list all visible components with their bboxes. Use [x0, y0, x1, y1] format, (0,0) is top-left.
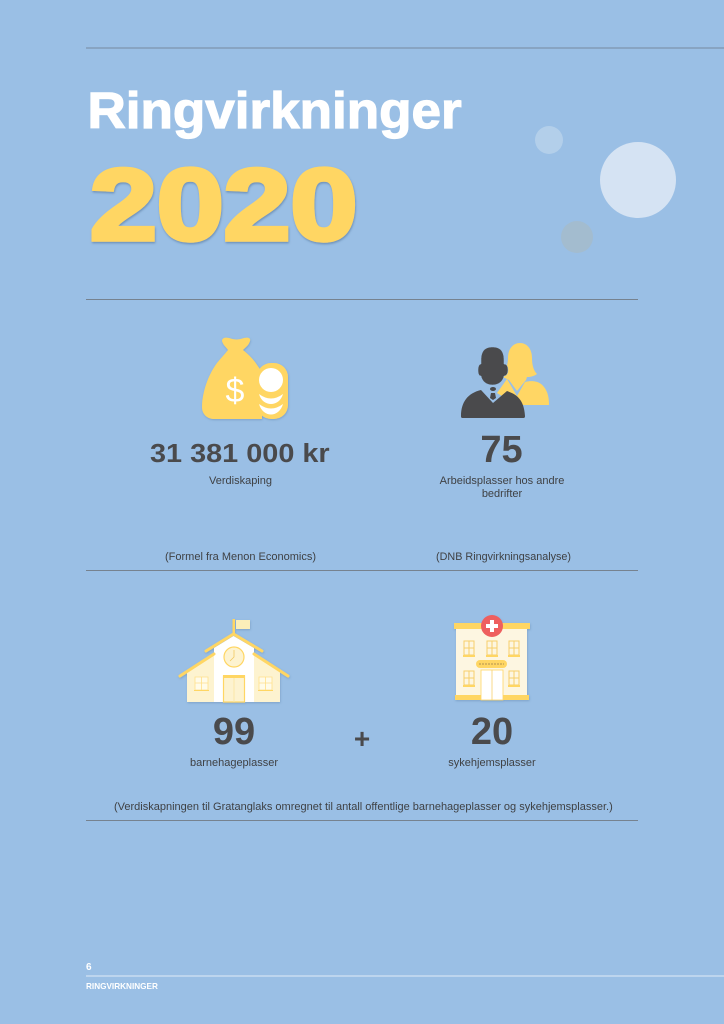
icon: money bag with coins: $	[226, 372, 245, 410]
label: Arbeidsplasser hos andre bedrifter	[440, 475, 564, 500]
source: Menon Economics: (Formel fra Menon Economics)	[165, 551, 316, 563]
label: Verdiskaping: Verdiskaping	[209, 475, 272, 487]
icon: nursing home building	[454, 615, 530, 700]
label: Arbeidsplasser hos andre bedrifter: bedrifter	[482, 488, 523, 500]
source: DNB: (DNB Ringvirkningsanalyse)	[436, 551, 571, 563]
value: 20: 20	[471, 711, 513, 753]
icon: money bag with coins	[202, 338, 288, 419]
footer section label: RINGVIRKNINGER	[86, 982, 158, 991]
explanatory note: (Verdiskapningen til Gratanglaks omregnet til antall offentlige barnehageplasser og sykehjemsplasser.)	[114, 801, 613, 813]
page number: 6	[86, 962, 92, 973]
icon: kindergarten building	[180, 619, 288, 702]
label: barnehageplasser: barnehageplasser	[190, 757, 278, 769]
label: sykehjemsplasser: sykehjemsplasser	[448, 757, 536, 769]
decorative circles	[535, 126, 676, 253]
label: Arbeidsplasser hos andre bedrifter: Arbeidsplasser hos andre	[440, 475, 564, 487]
value: 75: 75	[480, 429, 523, 471]
plus sign: +	[354, 723, 370, 754]
title: Ringvirkninger	[88, 83, 462, 140]
year heading 2020: 2020	[90, 149, 357, 261]
value: 99: 99	[213, 711, 255, 753]
value: 31 381 000 kr: 31 381 000 kr	[150, 438, 330, 468]
icon: two people	[461, 343, 549, 418]
